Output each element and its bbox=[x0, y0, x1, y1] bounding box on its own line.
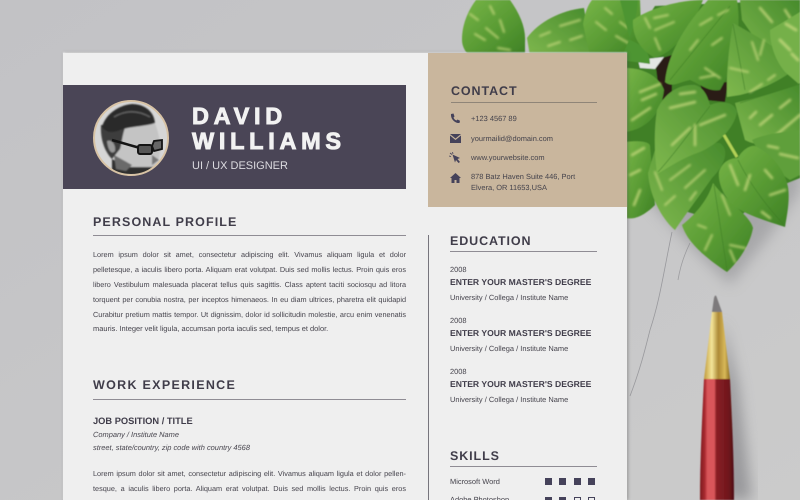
contact heading: CONTACT bbox=[451, 84, 517, 98]
icon: home bbox=[450, 173, 461, 183]
rule bbox=[450, 466, 597, 467]
heading: education: EDUCATION bbox=[450, 234, 531, 248]
profile text bbox=[93, 250, 406, 333]
hair bbox=[102, 104, 155, 132]
heading: skills: SKILLS bbox=[450, 449, 500, 463]
leaf: upper right bbox=[727, 23, 797, 97]
address: Elvera, OR 11653,USA bbox=[471, 182, 547, 192]
header band bbox=[63, 85, 406, 189]
cracks bbox=[630, 232, 672, 396]
job title: UI / UX DESIGNER bbox=[192, 160, 288, 172]
pen tip bbox=[712, 296, 722, 312]
leaf: left lower bbox=[626, 141, 655, 218]
pen shadow bbox=[722, 320, 752, 500]
education 2: 2008 bbox=[450, 316, 467, 325]
leaf: large upper centre bbox=[665, 0, 739, 90]
leaf: small heart bbox=[719, 146, 789, 227]
education 2: University / Collega / Institute Name bbox=[450, 344, 568, 353]
profile text: torquent per conubia nostra, per inceptos himenaeos. In eu diam ultrices, pharetra elit quidapid bbox=[93, 295, 406, 304]
icon: cursor bbox=[449, 152, 460, 163]
contact rule bbox=[451, 102, 597, 103]
name: DAVID bbox=[192, 103, 287, 129]
profile text: Curabitur pretium mattis tempor. Ut dignissim, dolor id sollicitudin molestie, arcu enim venenatis bbox=[93, 310, 406, 319]
skill: Adobe Photoshop bbox=[450, 495, 595, 500]
leaf: top left bbox=[462, 0, 525, 56]
neck and collar bbox=[111, 158, 153, 174]
leaf: upper bbox=[633, 0, 703, 58]
address: 878 Batz Haven Suite 446, Port bbox=[471, 172, 575, 181]
icon: phone bbox=[451, 114, 460, 123]
education 3: 2008 bbox=[450, 367, 467, 376]
education 2 bbox=[450, 316, 592, 353]
heading: personal profile: PERSONAL PROFILE bbox=[93, 215, 237, 229]
pen gold cone bbox=[704, 312, 730, 379]
ear bbox=[107, 141, 115, 153]
name bbox=[192, 103, 346, 154]
icon: envelope bbox=[450, 134, 461, 143]
profile text: Lorem ipsum dolor sit amet, consectetur adipiscing elit. Vivamus aliquam ligula et dolor bbox=[93, 250, 406, 259]
glasses bbox=[112, 140, 140, 148]
rule bbox=[93, 235, 406, 236]
leaf: left middle bbox=[626, 68, 664, 132]
leaf: far upper left bbox=[620, 0, 650, 64]
education 2: ENTER YOUR MASTER'S DEGREE bbox=[450, 328, 591, 338]
leaf: lower wide bbox=[648, 140, 725, 230]
profile text: libero Vestibulum malesuada placerat tellus quis sagittis. Class aptent taciti sociosqu ad litora bbox=[93, 280, 406, 289]
education 1: 2008 bbox=[450, 265, 467, 274]
leaf: right bbox=[735, 83, 800, 145]
nose shadow bbox=[152, 155, 159, 165]
profile text: mauris. Integer velit ligula, accumsan porta iaculis sed, tempus et dolor. bbox=[93, 324, 328, 333]
education 1 bbox=[450, 265, 592, 302]
faded side of head bbox=[101, 125, 126, 159]
plant pot and soil bbox=[638, 55, 728, 102]
face bbox=[113, 122, 160, 168]
rule bbox=[93, 399, 406, 400]
leaf: top right of page bbox=[583, 0, 642, 56]
contact panel bbox=[428, 53, 627, 207]
leaf: bottom bbox=[682, 183, 753, 272]
resume page bbox=[63, 53, 627, 500]
education 3 bbox=[450, 367, 592, 404]
address: street, state/country, zip code with country 4568 bbox=[93, 443, 250, 452]
profile photo bbox=[93, 100, 169, 176]
pen bbox=[700, 296, 734, 500]
pen red barrel bbox=[700, 379, 734, 500]
company: Company / Institute Name bbox=[93, 430, 179, 439]
name: WILLIAMS bbox=[192, 128, 346, 154]
leaf: centre heart bbox=[655, 85, 737, 174]
job title: JOB POSITION / TITLE bbox=[93, 416, 193, 426]
education 1: ENTER YOUR MASTER'S DEGREE bbox=[450, 277, 591, 287]
education 3: University / Collega / Institute Name bbox=[450, 395, 568, 404]
leaf: lower right bbox=[752, 130, 800, 180]
job text: tesque, a iaculis libero porta. Aliquam erat volutpat. Duis sed mollis lectus. Proin quis eros bbox=[93, 484, 406, 493]
education 3: ENTER YOUR MASTER'S DEGREE bbox=[450, 379, 591, 389]
leaf: right upper corner bbox=[770, 12, 800, 85]
plant base foliage bbox=[626, 0, 800, 225]
heading: work experience: WORK EXPERIENCE bbox=[93, 378, 236, 392]
plant shadow bbox=[630, 120, 800, 285]
phone: +123 4567 89 bbox=[471, 114, 517, 123]
job text bbox=[93, 469, 406, 500]
skill: Microsoft Word bbox=[450, 477, 595, 486]
job text: Lorem ipsum dolor sit amet, consectetur adipiscing elit. Vivamus aliquam ligula et dolor pellen- bbox=[93, 469, 406, 478]
education 1: University / Collega / Institute Name bbox=[450, 293, 568, 302]
website: www.yourwebsite.com bbox=[471, 153, 545, 162]
rule bbox=[450, 251, 597, 252]
email: yourmailid@domain.com bbox=[471, 134, 553, 143]
leaf: top right back bbox=[740, 0, 800, 70]
profile text: pelletesque, a iaculis libero porta. Aliquam erat volutpat. Duis sed mollis lectus. Proin quis eros bbox=[93, 265, 406, 274]
skill: Microsoft Word: Microsoft Word bbox=[450, 477, 500, 486]
leaf: top centre bbox=[527, 8, 592, 56]
address bbox=[471, 172, 576, 192]
plant stem bbox=[724, 135, 737, 157]
column divider bbox=[428, 235, 429, 500]
